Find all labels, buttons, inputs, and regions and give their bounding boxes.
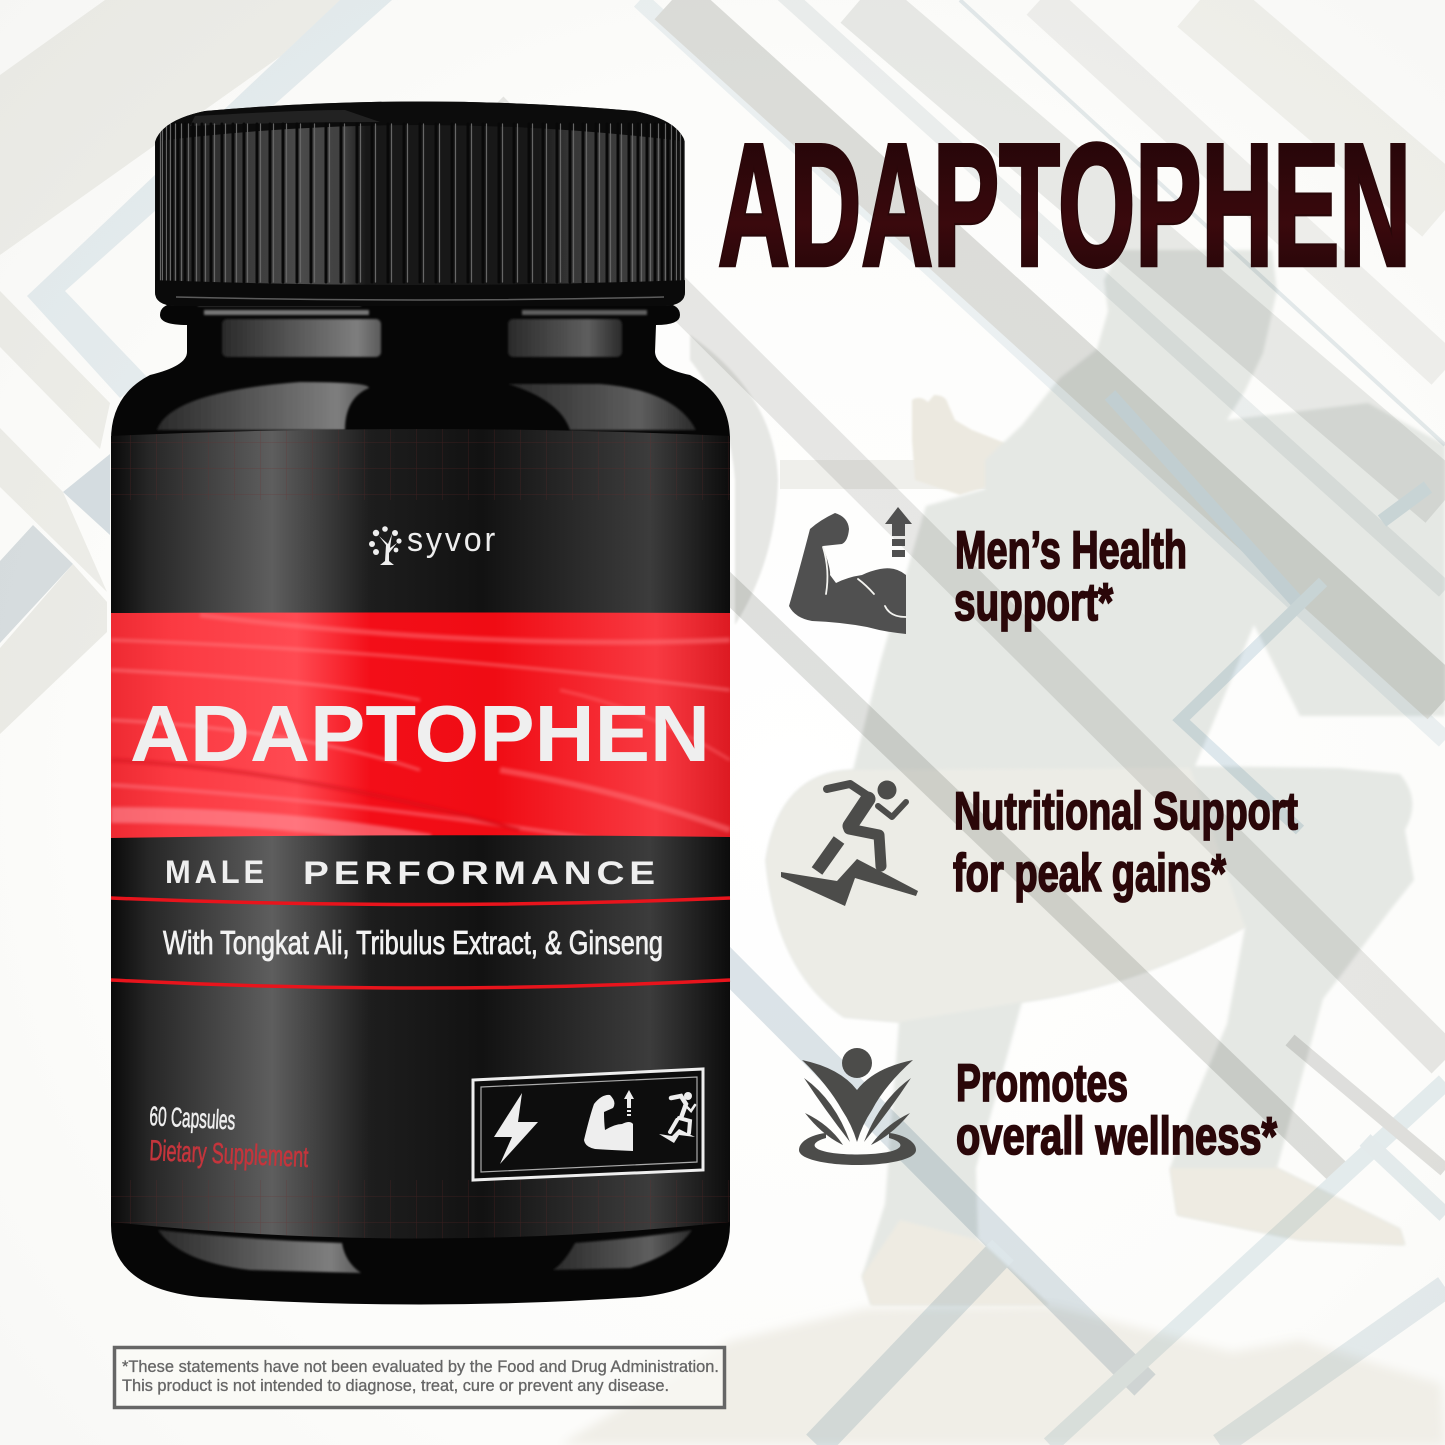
label product name: ADAPTOPHEN	[130, 689, 710, 778]
feature heading text: support*	[954, 573, 1113, 632]
icon: small muscle	[584, 1095, 633, 1151]
bottle neck and shoulders	[111, 303, 730, 1304]
feature heading text: overall wellness*	[956, 1107, 1277, 1166]
icon: small runner	[659, 1092, 695, 1143]
feature heading text: Nutritional Support	[954, 782, 1298, 841]
disclaimer text: *These statements have not been evaluated by the Food and Drug Administration.	[122, 1358, 719, 1376]
product bottle	[111, 90, 730, 1304]
neck highlights	[198, 299, 647, 357]
icon: lightning bolt	[494, 1093, 538, 1164]
icon: figure with leaves on ring	[799, 1048, 916, 1165]
label subtitle: MALE	[165, 854, 268, 890]
feature heading text: for peak gains*	[953, 844, 1226, 903]
disclaimer text: This product is not intended to diagnose, treat, cure or prevent any disease.	[122, 1377, 669, 1395]
wrap label	[111, 429, 730, 1238]
red band	[111, 612, 730, 842]
icon: small arrow	[624, 1090, 634, 1116]
label ingredients line: With Tongkat Ali, Tribulus Extract, & Ginseng	[163, 924, 663, 961]
capsule count: 60 Capsules	[149, 1101, 236, 1135]
shoulder highlights	[157, 382, 696, 430]
label red lines	[111, 898, 730, 988]
icon: running figure	[781, 780, 918, 906]
feature: nutritional support	[781, 780, 1298, 906]
feature: overall wellness	[799, 1048, 1277, 1166]
feature heading text: Men’s Health	[955, 521, 1187, 580]
bottom glass highlights	[158, 1230, 692, 1273]
icon: flexed muscle with arrow	[789, 507, 912, 634]
bottle cap	[150, 90, 690, 310]
brand logo: syvor	[369, 521, 498, 565]
feature heading text: Promotes	[956, 1054, 1128, 1113]
feature: men's health support	[789, 507, 1187, 634]
label icon box	[473, 1069, 703, 1180]
brand logo: syvor: syvor	[407, 521, 498, 559]
background silhouette of squatting athlete	[560, 250, 1445, 1445]
feature heading text	[953, 782, 1298, 903]
label subtitle: PERFORMANCE	[303, 855, 660, 891]
label subtitle	[165, 854, 660, 891]
feature heading text	[956, 1054, 1277, 1166]
feature heading text	[954, 521, 1187, 632]
disclaimer text	[122, 1358, 719, 1395]
dietary supplement label: Dietary Supplement	[149, 1135, 309, 1174]
disclaimer box	[114, 1348, 724, 1408]
